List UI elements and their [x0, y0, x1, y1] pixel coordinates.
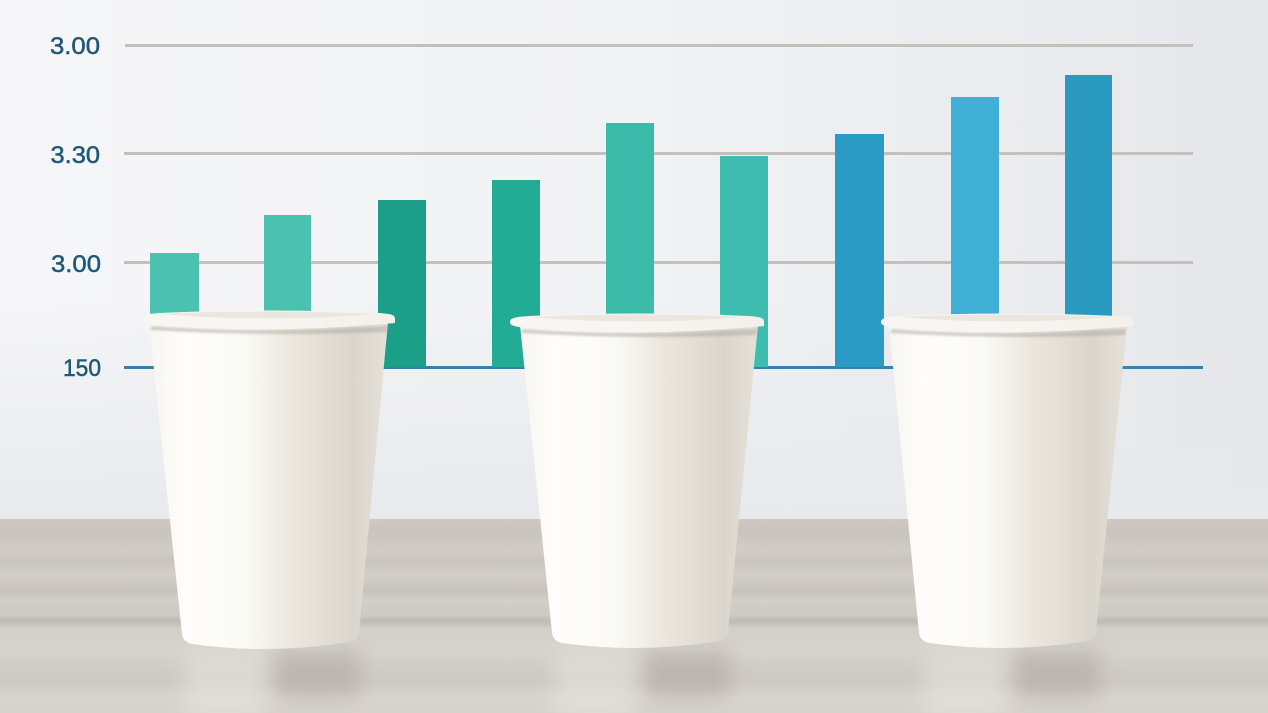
background wall — [0, 0, 1268, 520]
chart baseline — [124, 366, 1203, 369]
y-axis labels: 3.30 — [50, 142, 100, 169]
y-axis labels: 150 — [63, 355, 101, 382]
gridlines — [124, 44, 1193, 264]
wooden table — [0, 519, 1268, 713]
paper cup 2 — [510, 314, 764, 648]
paper cup 1 — [141, 310, 395, 649]
bar chart — [150, 75, 1112, 367]
y-axis labels: 3.00 — [50, 33, 100, 60]
y-axis labels: 3.00 — [51, 251, 101, 278]
cup reflections on table — [185, 650, 1100, 713]
paper cup 3 — [881, 314, 1133, 648]
y-axis labels — [50, 33, 101, 382]
